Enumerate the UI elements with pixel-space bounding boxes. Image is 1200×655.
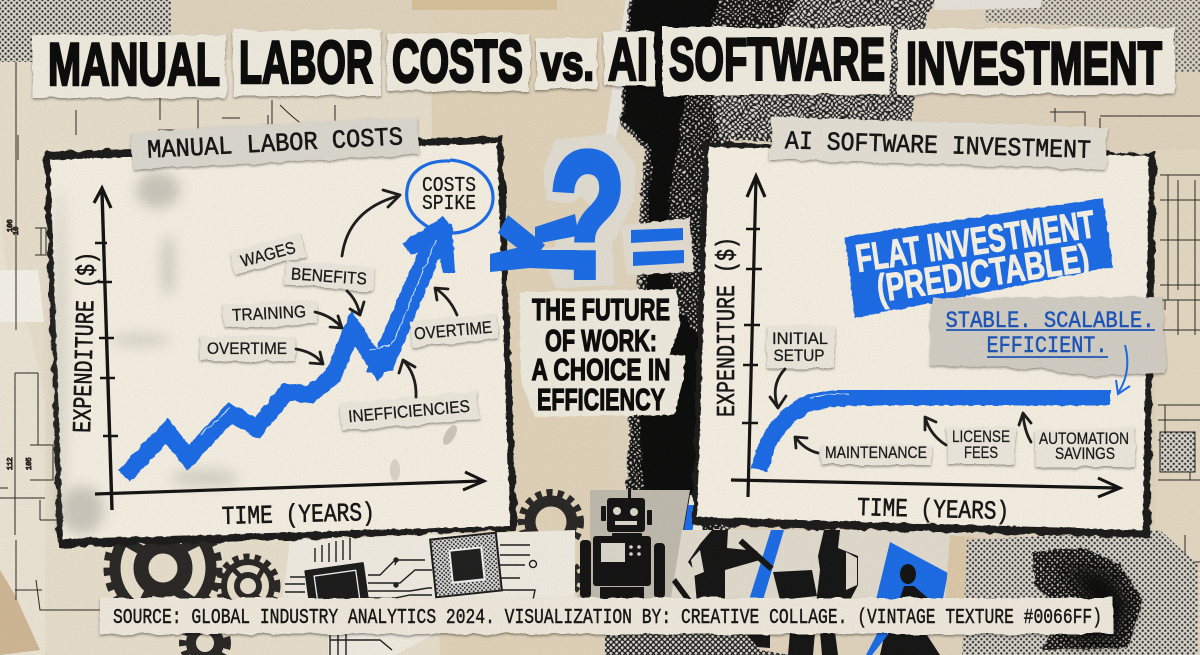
title word: manual — [32, 31, 226, 98]
heading: future of work: OF WORK: — [545, 323, 657, 358]
arrow: training — [315, 312, 342, 328]
panel paper — [697, 147, 1149, 530]
centre: question mark and tape — [490, 114, 694, 315]
callout: stable scalable efficient: STABLE. SCALABLE. — [946, 308, 1154, 334]
bottom right: halftone photo — [962, 530, 1198, 655]
question mark paper — [543, 134, 636, 288]
panel frame — [692, 142, 1156, 538]
callout: flat investment: (PREDICTABLE) — [874, 237, 1092, 311]
label: overtime left: OVERTIME — [207, 339, 287, 358]
chart: cost axes — [94, 188, 484, 510]
background: blueprint drawings: 112 — [7, 457, 15, 470]
arrow: automation savings — [1019, 413, 1031, 442]
title word: software: SOFTWARE — [669, 26, 885, 93]
label: overtime right: OVERTIME — [413, 318, 493, 343]
label: inefficiencies: INEFFICIENCIES — [347, 397, 471, 426]
y axis label: EXPENDITURE ($) — [68, 251, 103, 433]
background: torn black halftone centre strip — [604, 0, 1200, 530]
label: automation savings: SAVINGS — [1055, 444, 1115, 463]
title word: vs.: vs. — [541, 35, 594, 91]
panel heading: AI SOFTWARE INVESTMENT — [785, 126, 1091, 166]
source strip — [100, 598, 1113, 634]
arrow: to costs spike — [342, 190, 400, 256]
icon: blue tape cross — [490, 214, 590, 272]
arrow: overtime right — [435, 288, 457, 315]
worker at machine — [773, 530, 858, 604]
line: flat investment — [759, 394, 1110, 470]
bottom collage: workers — [670, 530, 1000, 655]
label: initial setup — [767, 326, 835, 368]
arrow: blue to line — [1116, 345, 1130, 394]
title word: ai: AI — [608, 26, 648, 93]
arrow: license fees — [925, 417, 946, 445]
arrow: overtime left — [296, 349, 323, 364]
title word: costs — [387, 28, 530, 95]
arrow: inefficiencies — [399, 360, 416, 397]
y axis label: EXPENDITURE ($) — [712, 237, 742, 417]
callout: stable scalable efficient — [930, 297, 1166, 376]
callout: costs spike — [407, 160, 493, 233]
title word: manual: MANUAL — [48, 31, 220, 98]
background: blueprint drawings: 105 — [26, 457, 34, 470]
background: blueprint drawings: 10 — [13, 227, 21, 235]
x axis label: TIME (YEARS) — [857, 493, 1010, 527]
callout: costs spike: COSTS — [422, 175, 476, 198]
heading: future of work — [520, 289, 685, 417]
label: maintenance: MAINTENANCE — [825, 443, 927, 462]
seated worker — [898, 564, 930, 604]
label: initial setup: SETUP — [774, 346, 824, 365]
label: training: TRAINING — [232, 302, 306, 325]
heading: future of work: THE FUTURE — [532, 292, 670, 327]
panel: ai software investment — [692, 117, 1166, 538]
callout: flat investment — [845, 198, 1113, 318]
arrow: benefits — [347, 291, 364, 315]
bottom collage: dark halftone under strip — [605, 633, 790, 655]
label: benefits: BENEFITS — [290, 264, 368, 289]
background: halftone top-left patch — [0, 0, 171, 62]
label: license fees — [947, 427, 1015, 464]
icon: question mark: ? — [549, 114, 626, 315]
heading: future of work: A CHOICE IN — [532, 352, 670, 387]
chart: investment axes — [731, 176, 1120, 497]
label: initial setup: INITIAL — [772, 329, 828, 348]
title word: software — [662, 26, 890, 95]
stains — [53, 172, 460, 534]
line: rising manual cost — [124, 217, 455, 476]
arrow: maintenance — [795, 437, 818, 453]
bottom collage: robot — [575, 490, 708, 605]
label: license fees: LICENSE — [952, 427, 1010, 446]
heading: future of work: EFFICIENCY — [537, 382, 665, 417]
panel heading: MANUAL LABOR COSTS — [146, 122, 404, 166]
label: wages: WAGES — [239, 238, 298, 271]
callout: stable scalable efficient: EFFICIENT. — [986, 333, 1108, 359]
bottom collage: circuit paper with chips — [282, 530, 575, 655]
x axis label: TIME (YEARS) — [221, 498, 375, 532]
arrow: initial setup — [770, 369, 786, 408]
title word: costs: COSTS — [392, 28, 523, 95]
icon: equals sign — [621, 218, 694, 275]
background: blueprint drawings: 106 — [7, 219, 15, 232]
callout: costs spike: SPIKE — [422, 193, 476, 216]
bottom collage: gears — [108, 493, 580, 655]
panel: manual labor costs — [44, 117, 517, 548]
label: automation savings — [1035, 429, 1135, 467]
title — [32, 26, 1175, 98]
label: automation savings: AUTOMATION — [1039, 429, 1129, 448]
label: license fees: FEES — [964, 443, 998, 462]
title word: labor: LABOR — [239, 29, 373, 96]
panel frame — [44, 136, 517, 548]
panel paper — [50, 143, 510, 539]
worker with hammer — [672, 530, 774, 604]
title word: labor — [233, 29, 381, 96]
icon: microchip right — [430, 533, 502, 597]
icon: microchip left — [304, 562, 370, 615]
